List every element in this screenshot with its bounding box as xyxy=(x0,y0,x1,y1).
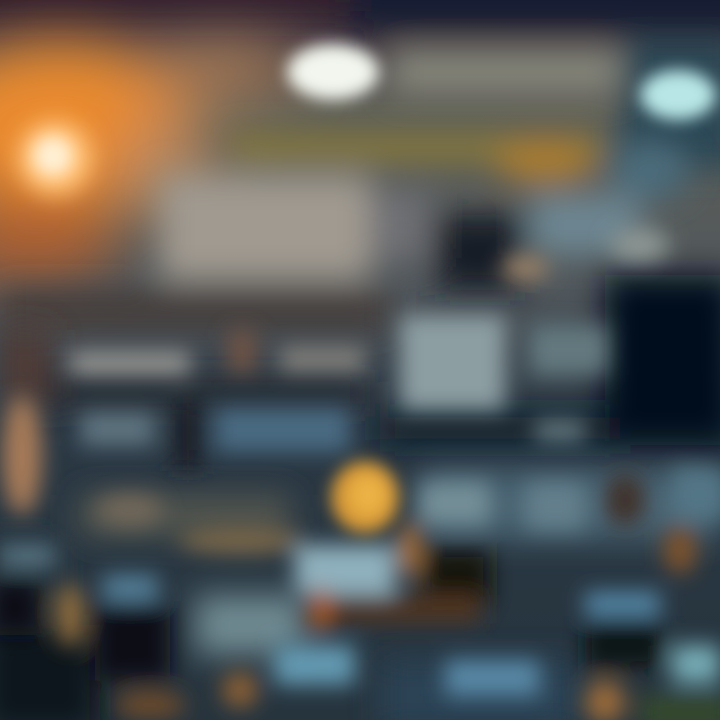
mid wall haze xyxy=(0,135,690,330)
lower figures and objects xyxy=(0,395,720,720)
dark right block xyxy=(0,275,720,445)
icon: cyan ceiling light right xyxy=(640,70,716,120)
lower scene base xyxy=(0,470,720,720)
mid panels xyxy=(70,229,670,470)
orange glow upper left xyxy=(0,40,300,285)
icon: white ceiling light centre xyxy=(287,44,379,100)
icon: sun glare at upper left xyxy=(17,120,93,196)
icon: golden glowing orb xyxy=(331,461,399,533)
top dark ceiling band xyxy=(0,0,720,170)
